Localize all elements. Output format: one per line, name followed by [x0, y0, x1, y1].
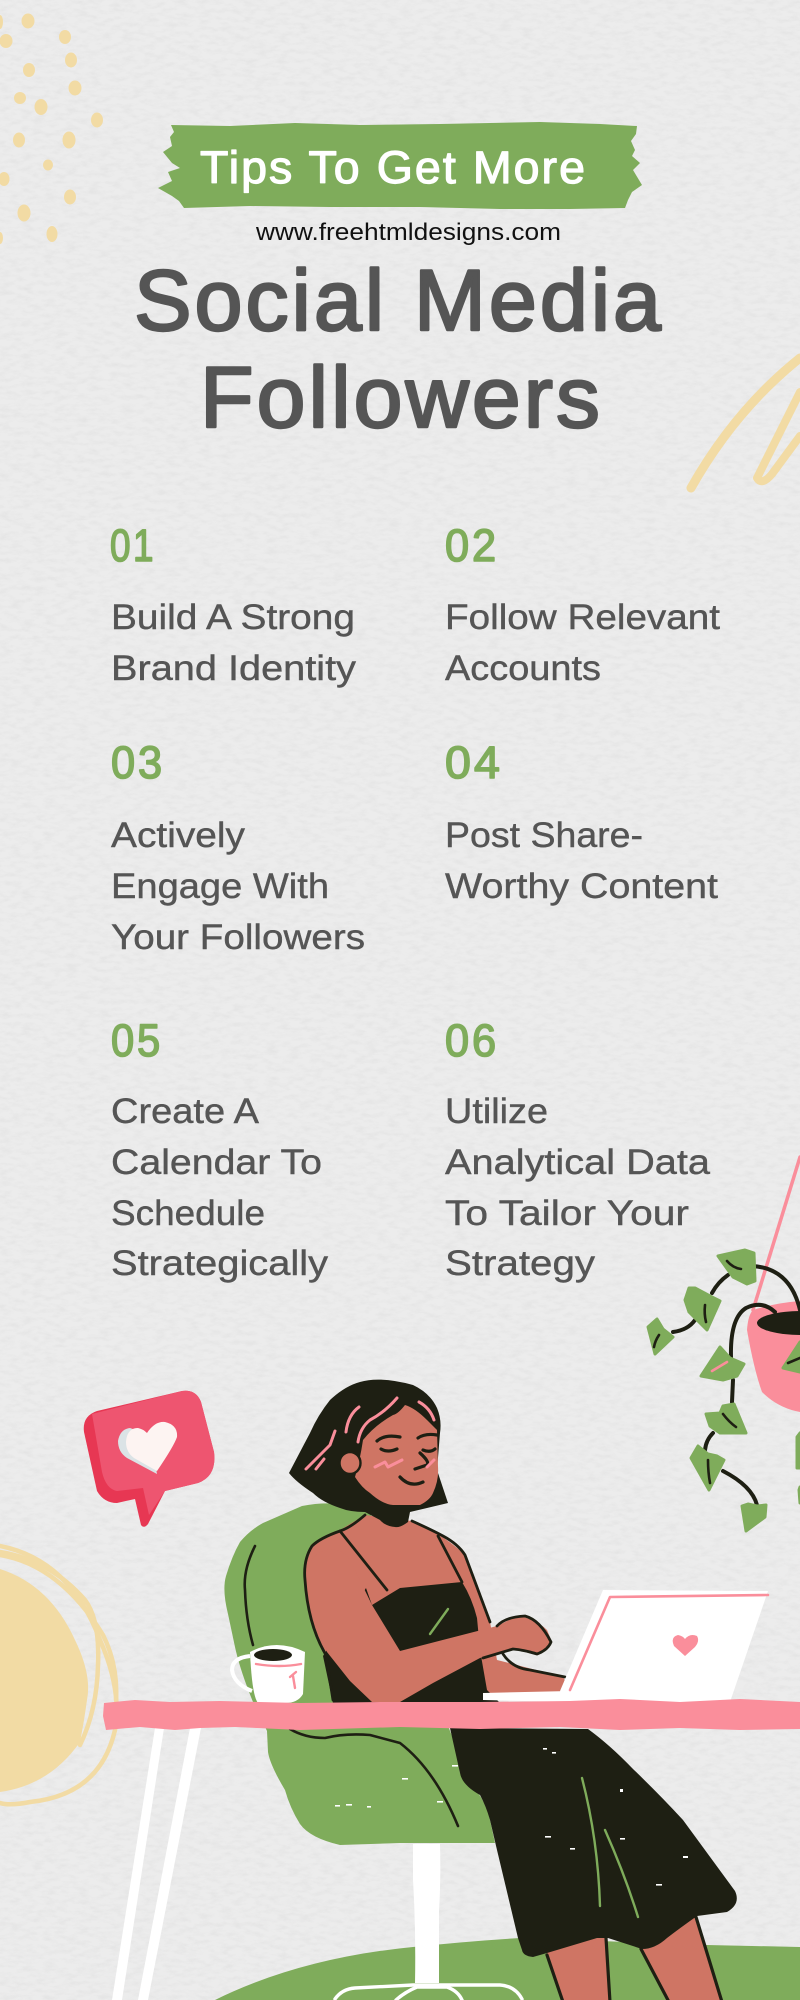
tip 06: [445, 1015, 711, 1283]
tip 01: Build A Strong: [111, 598, 355, 637]
illustration: hanging plant: [648, 1157, 800, 1531]
tip 04: [445, 737, 718, 906]
tip 01: Brand Identity: [111, 649, 357, 688]
website url: www.freehtmldesigns.com: [255, 219, 561, 246]
tip 05: Create A: [111, 1092, 260, 1131]
decorative yellow scribble top right: [691, 358, 800, 488]
tip 02: 02: [445, 520, 499, 571]
pink vein: [712, 1362, 727, 1371]
woman figure: [289, 1380, 737, 2000]
tip 05: Calendar To: [111, 1143, 322, 1182]
facial features: [377, 1434, 437, 1484]
pot opening: [757, 1311, 800, 1335]
tip 03: Engage With: [111, 867, 329, 906]
tip 03: [111, 737, 365, 957]
decorative yellow circle with scribble: [0, 1546, 117, 1804]
body outlines: [305, 1515, 565, 1700]
bubble face: [92, 1391, 214, 1515]
leaf veins: [654, 1261, 800, 1483]
skirt folds: [582, 1778, 638, 1917]
tip 06: Analytical Data: [445, 1143, 711, 1182]
tip 05: 05: [111, 1015, 163, 1066]
vines: [673, 1266, 800, 1505]
hair: [289, 1380, 448, 1527]
pot string: [753, 1157, 800, 1310]
main title: Followers: [200, 350, 603, 446]
office chair: [224, 1503, 522, 2000]
pot: [747, 1301, 800, 1412]
tip 04: 04: [445, 737, 503, 788]
decorative yellow dots: [0, 14, 103, 244]
tip 04: Post Share-: [445, 816, 643, 855]
chair base: [335, 1985, 522, 2000]
tip 06: Strategy: [445, 1244, 596, 1283]
main title: [134, 253, 664, 446]
tip 03: Actively: [111, 816, 246, 855]
bubble side: [84, 1391, 214, 1527]
face: [355, 1405, 438, 1505]
laptop base: [483, 1691, 570, 1702]
green brush stroke: [158, 122, 642, 209]
laptop screen: [560, 1590, 768, 1702]
tip 05: Strategically: [111, 1244, 329, 1283]
chair speckles: [335, 1765, 458, 1808]
chair stem: [413, 1844, 440, 1983]
floor shape: [215, 1938, 800, 2000]
icon: heart notification bubble: [84, 1391, 214, 1527]
laptop heart: [673, 1635, 698, 1656]
tip 02: [445, 520, 720, 688]
torso and near arm skin: [305, 1515, 572, 1702]
dress bodice: [323, 1582, 500, 1703]
leg outlines: [547, 1917, 722, 2000]
heart: [126, 1422, 177, 1471]
table legs: [112, 1728, 201, 2000]
tip 01: 01: [110, 520, 156, 571]
ear: [340, 1452, 360, 1474]
screen edge: [570, 1595, 768, 1690]
skirt speckles: [543, 1748, 688, 1886]
bodice highlight: [430, 1609, 448, 1634]
table top: [103, 1699, 800, 1730]
main title: Social Media: [134, 253, 664, 349]
forearm and hand: [305, 1549, 552, 1702]
tip 04: Worthy Content: [445, 867, 718, 906]
tip 06: Utilize: [445, 1092, 548, 1131]
tip 06: 06: [445, 1015, 499, 1066]
chair creases: [245, 1546, 458, 1826]
heading banner: Tips To Get More: [158, 122, 642, 209]
hair and cheek highlights: [306, 1398, 434, 1469]
tip 02: Accounts: [445, 649, 601, 688]
tip 03: Your Followers: [111, 918, 365, 957]
laptop: [483, 1590, 768, 1702]
tip 06: To Tailor Your: [445, 1194, 689, 1233]
banner text: Tips To Get More: [200, 142, 587, 193]
chair cushion: [224, 1503, 495, 1845]
tip 01: [110, 520, 357, 688]
heart shadow: [118, 1428, 157, 1474]
legs: [546, 1936, 610, 2000]
skirt: [450, 1728, 737, 1957]
tip 03: 03: [111, 737, 165, 788]
tip 05: Schedule: [111, 1194, 265, 1233]
tip 05: [111, 1015, 329, 1283]
tip 02: Follow Relevant: [445, 598, 720, 637]
coffee cup: [232, 1645, 305, 1703]
leaves: [648, 1250, 800, 1531]
